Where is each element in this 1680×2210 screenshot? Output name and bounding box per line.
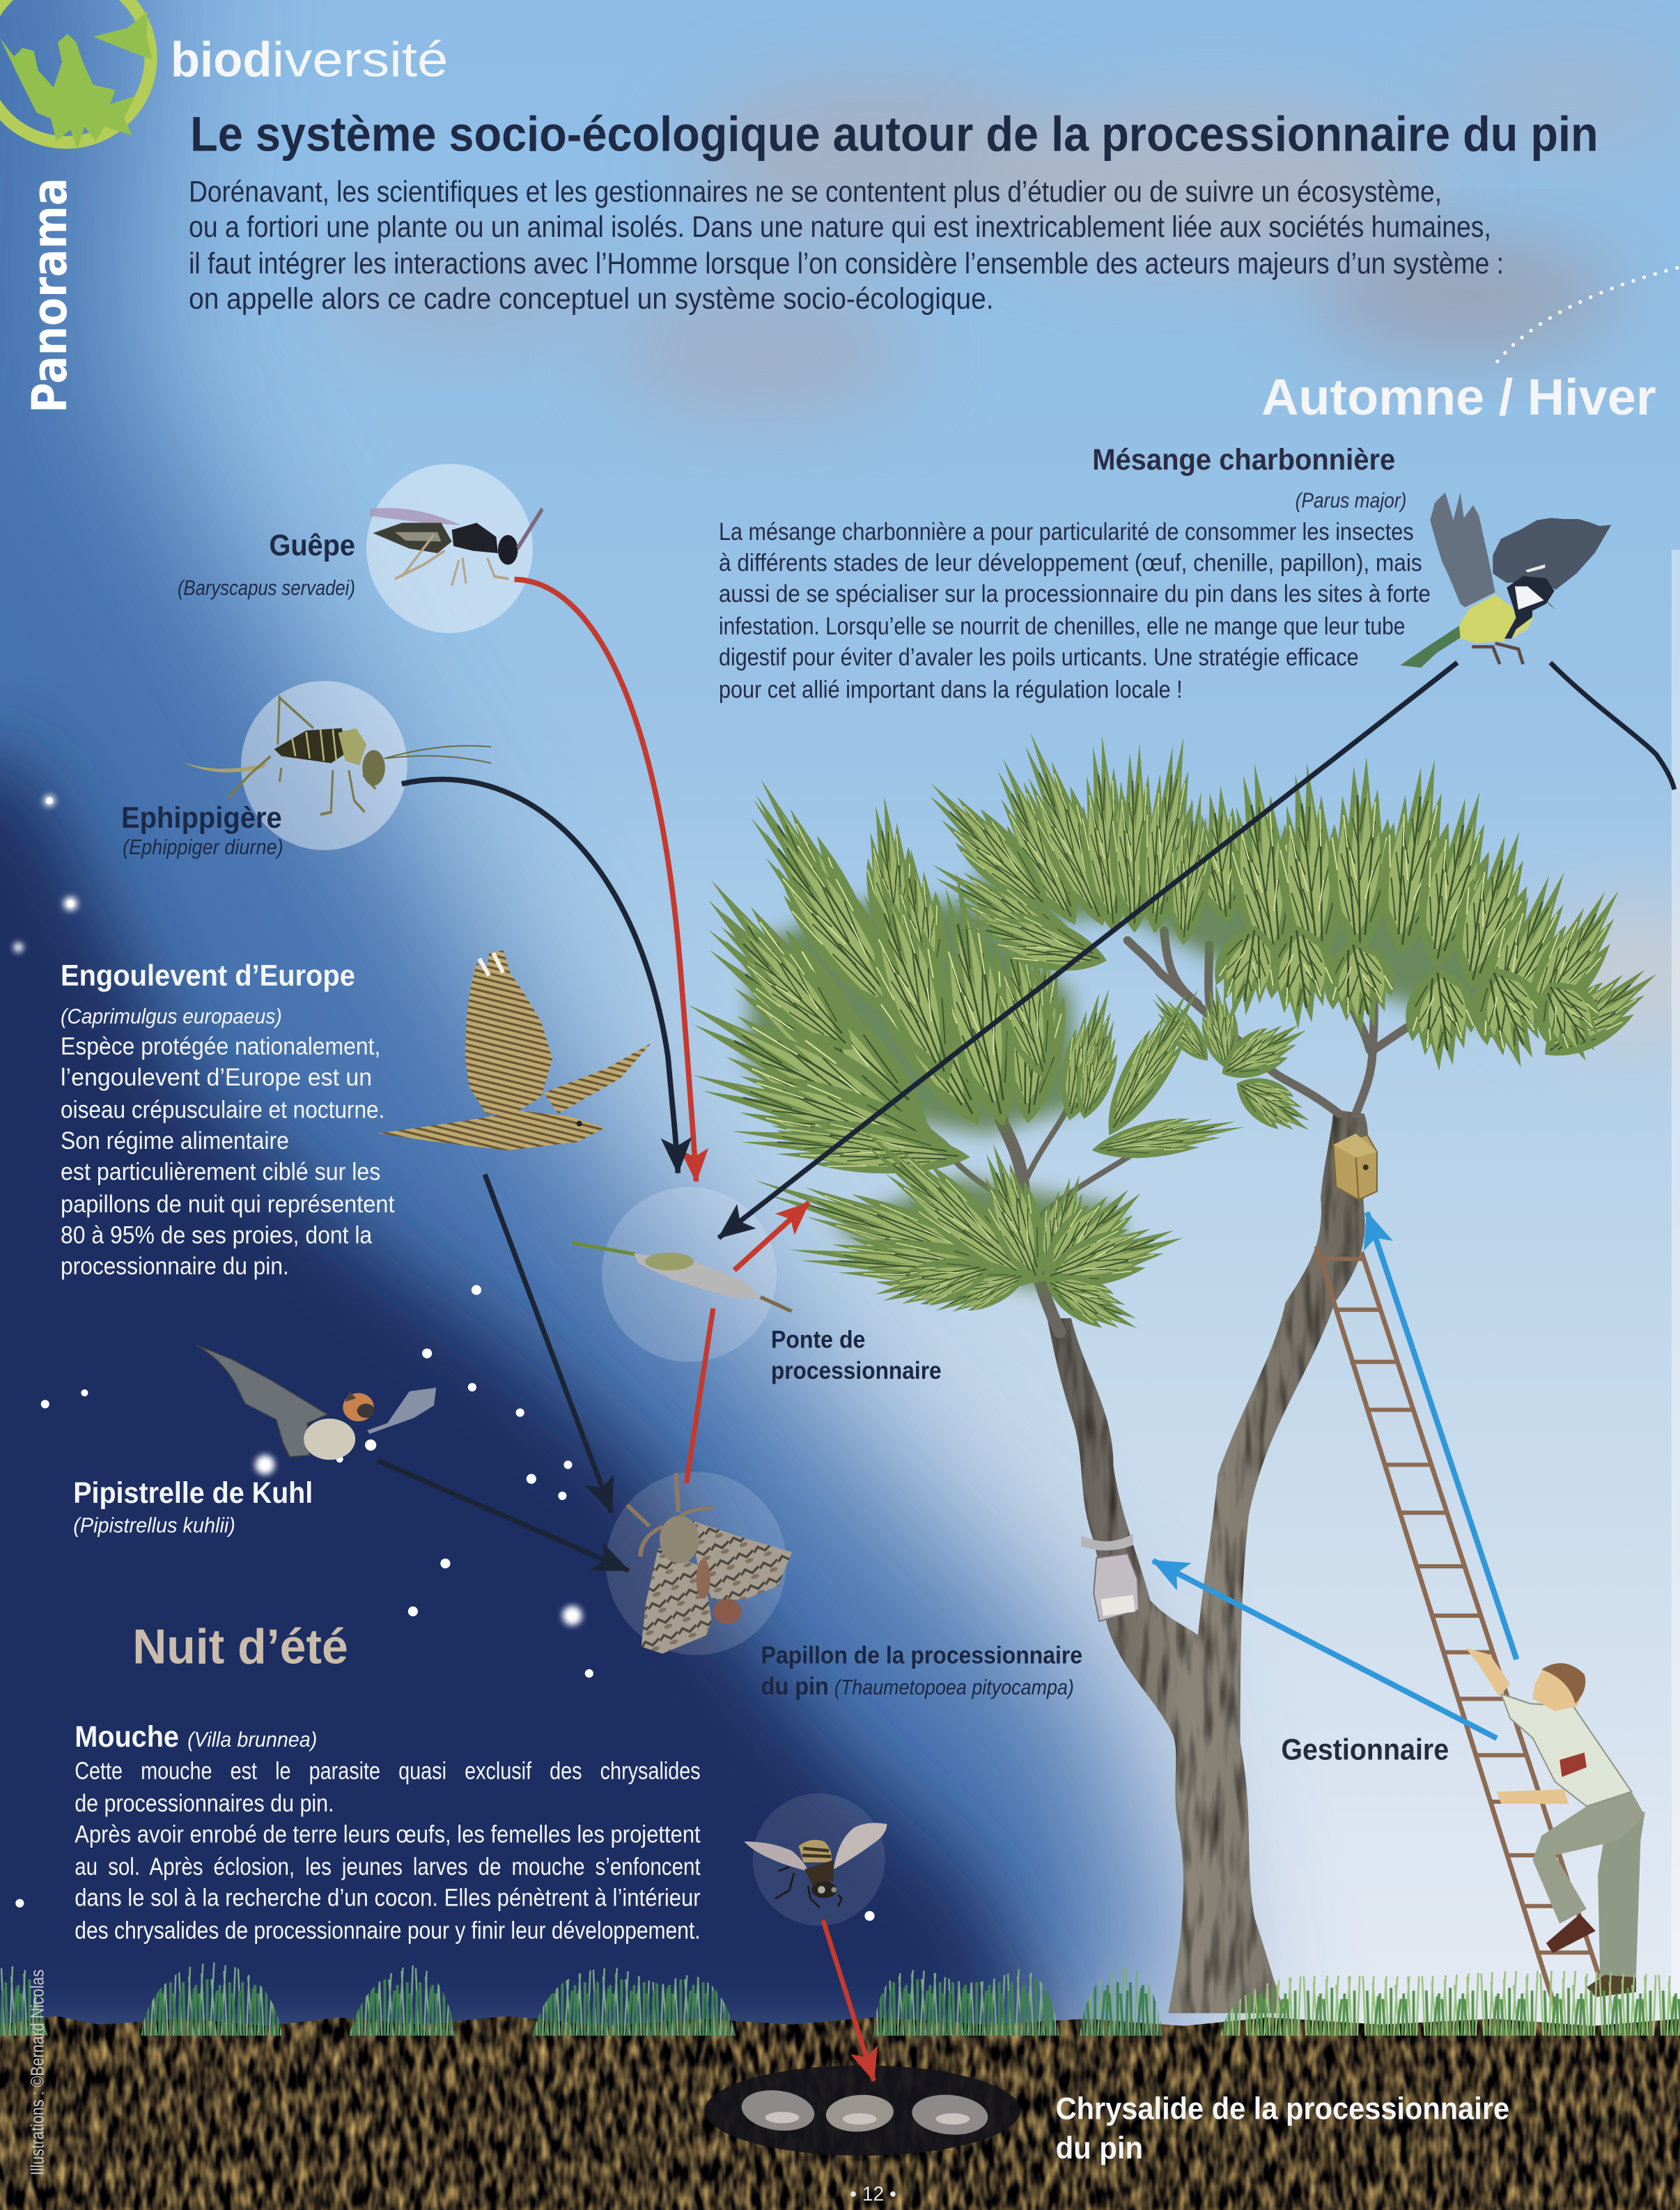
label: pipistrelle <box>73 1477 313 1538</box>
label: éphippigère: Ephippigère <box>121 802 282 835</box>
text block: engoulevent: papillons de nuit qui représentent <box>61 1190 395 1218</box>
arrow: gestionnaire to piège <box>1153 1561 1497 1738</box>
man on ladder: gestionnaire <box>1465 1648 1645 1997</box>
label: chrysalide: du pin <box>1056 2131 1143 2165</box>
text block: engoulevent <box>61 959 395 1280</box>
text block: engoulevent: 80 à 95% de ses proies, dont la <box>61 1221 372 1249</box>
text block: mouche: Mouche <box>75 1721 179 1754</box>
credit: Illustrations : ©Bernard Nicolas <box>27 1970 48 2175</box>
text block: engoulevent: Son régime alimentaire <box>61 1127 289 1154</box>
foliage: upper crown <box>910 725 1670 1168</box>
spotlight circles <box>241 464 885 1926</box>
season label: Automne / Hiver: Automne / Hiver <box>1261 369 1656 426</box>
foliage backing <box>747 825 1564 1290</box>
text block: mouche: des chrysalides de processionnaire pour y finir leur développement. <box>75 1916 701 1944</box>
arrow: pipistrelle to papillon <box>378 1460 628 1570</box>
heading: biodiversité: biod <box>171 32 272 87</box>
wasp <box>370 508 543 586</box>
season label: nuit d'été: Nuit d’été <box>132 1620 348 1675</box>
stars in night sky <box>13 795 875 1921</box>
nightjar: engoulevent <box>378 950 651 1150</box>
foliage: lower crown <box>745 1115 1190 1344</box>
text block: mésange charbonnière <box>719 444 1431 704</box>
text block: mésange charbonnière: à différents stades de leur développement (œuf, chenille, papillon), mais <box>719 549 1422 577</box>
intro text: il faut intégrer les interactions avec l’Homme lorsque l’on considère l’ensemble des acteurs majeurs d’un système : <box>189 248 1504 281</box>
intro text: Dorénavant, les scientifiques et les gestionnaires ne se contentent plus d’étudier ou de suivre un écosystème, <box>189 176 1442 208</box>
fly: mouche <box>744 1823 887 1908</box>
text block: mouche: dans le sol à la recherche d’un cocon. Elles pénètrent à l’intérieur <box>75 1884 701 1912</box>
arrow: mésange to page edge <box>1550 663 1674 789</box>
label: guêpe <box>178 530 355 600</box>
dotted season path <box>1491 268 1677 369</box>
cricket: ephippigère <box>182 695 491 814</box>
ground soil <box>0 2016 1680 2210</box>
text block: mouche <box>75 1721 701 1944</box>
text block: mouche: au sol. Après éclosion, les jeunes larves de mouche s’enfoncent <box>75 1853 701 1880</box>
label: éphippigère: (Ephippiger diurne) <box>123 836 283 859</box>
label: guêpe: Guêpe <box>269 530 355 562</box>
tit: mésange <box>1400 493 1611 667</box>
text block: engoulevent: est particulièrement ciblé sur les <box>61 1158 380 1186</box>
label: ponte <box>771 1325 942 1384</box>
text block: mésange charbonnière: Mésange charbonnière <box>1092 444 1395 477</box>
arrow: éphippigère to ponte <box>402 780 678 1173</box>
arrow: mésange to ponte <box>719 663 1457 1238</box>
nest box <box>1333 1134 1377 1200</box>
label: pipistrelle: (Pipistrellus kuhlii) <box>73 1515 235 1538</box>
text block: mésange charbonnière: pour cet allié important dans la régulation locale ! <box>719 676 1183 704</box>
logo: biodiversity ring <box>0 0 153 149</box>
tree trunk <box>1047 1109 1368 2014</box>
text block: mésange charbonnière: aussi de se spécialiser sur la processionnaire du pin dans les sites à forte <box>719 580 1431 608</box>
label: pipistrelle: Pipistrelle de Kuhl <box>73 1477 313 1510</box>
arrow: guêpe to ponte <box>515 580 697 1182</box>
text block: mouche: Cette mouche est le parasite quasi exclusif des chrysalides <box>75 1757 701 1785</box>
tree branches <box>913 930 1440 1332</box>
heading: biodiversité: iversité <box>272 32 448 87</box>
label: guêpe: (Baryscapus servadei) <box>178 577 355 600</box>
text block: engoulevent: l’engoulevent d’Europe est un <box>61 1063 372 1091</box>
text block: mésange charbonnière: infestation. Lorsqu’elle se nourrit de chenilles, elle ne mange que leur tube <box>719 612 1405 640</box>
text block: mouche: de processionnaires du pin. <box>75 1789 334 1817</box>
moth <box>627 1473 792 1654</box>
text block: engoulevent: processionnaire du pin. <box>61 1252 289 1280</box>
label: papillon: (Thaumetopoea pityocampa) <box>834 1676 1074 1699</box>
arrow: papillon to ponte <box>686 1308 713 1483</box>
label: chrysalide: Chrysalide de la processionnaire <box>1056 2092 1509 2126</box>
label: papillon <box>761 1641 1082 1700</box>
arrow: mouche to chrysalide <box>823 1920 874 2081</box>
label: gestionnaire: Gestionnaire <box>1281 1733 1449 1766</box>
text block: mouche: Après avoir enrobé de terre leurs œufs, les femelles les projettent <box>75 1821 701 1848</box>
text block: mésange charbonnière: digestif pour éviter d’avaler les poils urticants. Une stratégie efficace <box>719 643 1359 671</box>
text block: engoulevent: (Caprimulgus europaeus) <box>61 1005 282 1028</box>
label: éphippigère <box>121 802 283 859</box>
arrow: engoulevent to papillon <box>485 1175 612 1513</box>
intro text <box>189 176 1504 316</box>
text block: engoulevent: Engoulevent d’Europe <box>61 959 355 992</box>
text block: mésange charbonnière: La mésange charbonnière a pour particularité de consommer les insectes <box>719 518 1414 546</box>
bat: pipistrelle <box>196 1345 436 1460</box>
chrysalis chamber <box>705 2065 1020 2156</box>
foliage: left crown <box>667 766 1126 1183</box>
ladder <box>1316 1246 1600 2006</box>
intro text: ou a fortiori une plante ou un animal isolés. Dans une nature qui est inextricablement liée aux sociétés humaines, <box>189 211 1491 244</box>
intro text: on appelle alors ce cadre conceptuel un système socio-écologique. <box>189 283 994 316</box>
text block: engoulevent: Espèce protégée nationalement, <box>61 1033 380 1060</box>
arrow: gestionnaire to nichoir <box>1367 1212 1516 1660</box>
page number: • 12 • <box>850 2184 896 2206</box>
label: ponte: processionnaire <box>771 1357 942 1384</box>
interaction arrows <box>378 580 1674 2081</box>
label: chrysalide <box>1056 2092 1509 2165</box>
vertical section label: Panorama: Panorama <box>22 178 78 413</box>
heading: biodiversité <box>171 32 448 87</box>
label: papillon: du pin <box>761 1672 829 1700</box>
arrow: ponte to tree <box>734 1203 809 1270</box>
label: ponte: Ponte de <box>771 1325 865 1353</box>
text block: engoulevent: oiseau crépusculaire et nocturne. <box>61 1096 384 1124</box>
grass clumps <box>0 1963 1680 2036</box>
egg batch <box>572 1243 791 1311</box>
pine tree <box>667 725 1670 2014</box>
text block: mésange charbonnière: (Parus major) <box>1296 489 1406 512</box>
text block: mouche: (Villa brunnea) <box>187 1729 317 1752</box>
pheromone trap on trunk <box>1081 1534 1139 1621</box>
label: papillon: Papillon de la processionnaire <box>761 1641 1082 1669</box>
